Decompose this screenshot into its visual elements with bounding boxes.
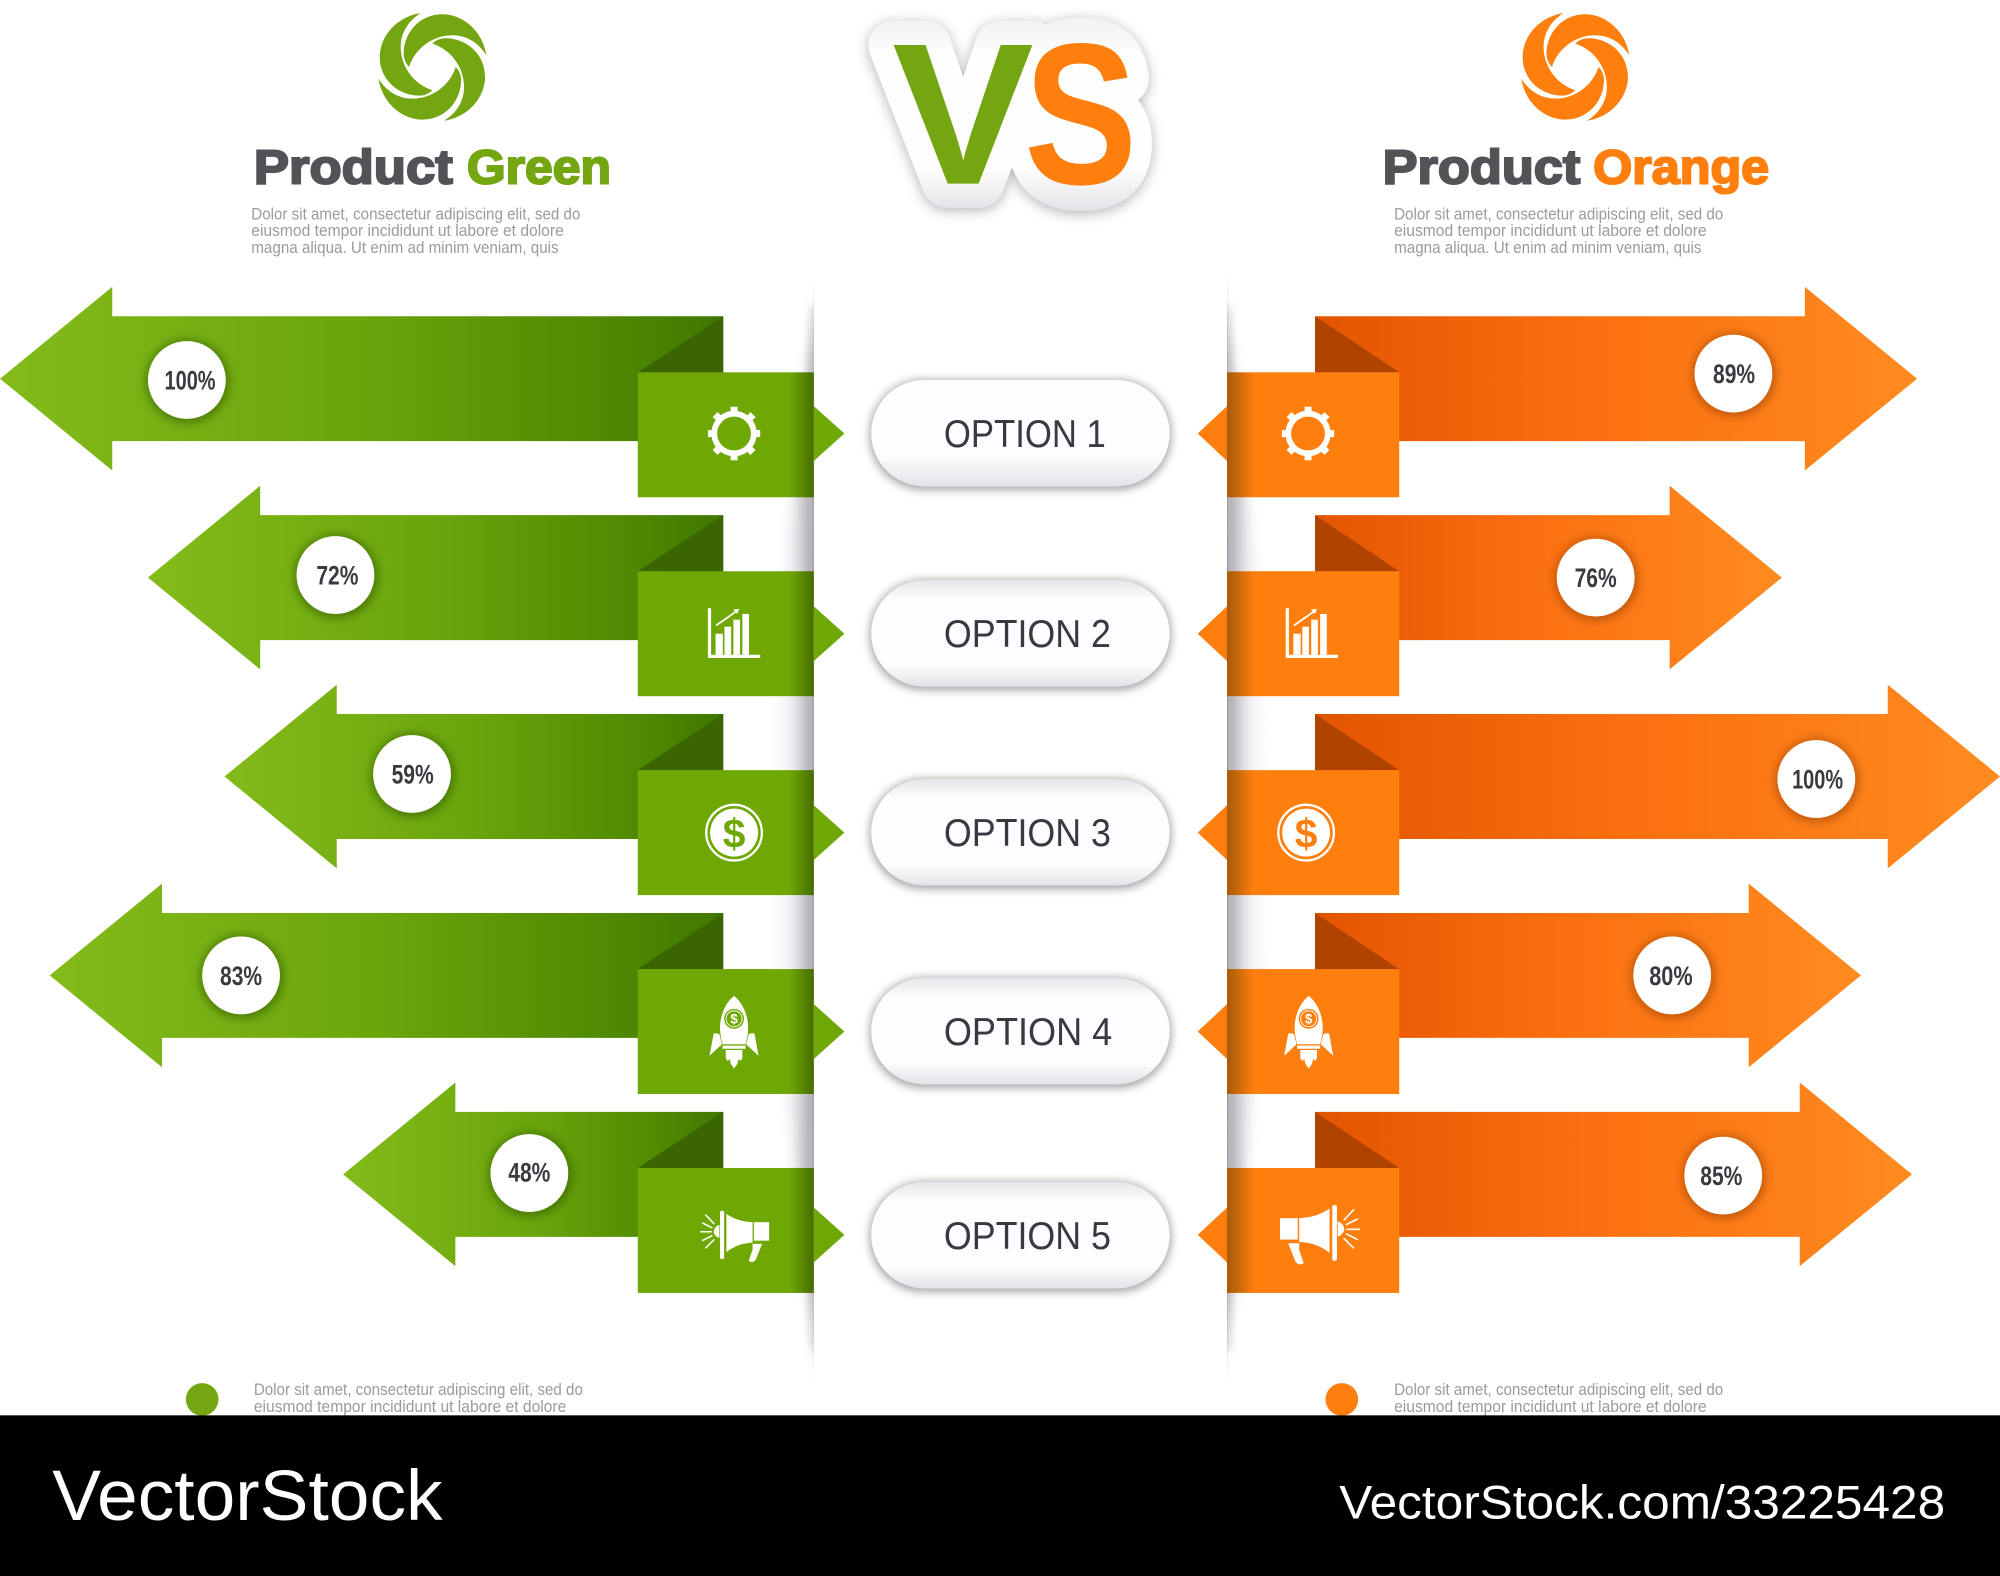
icon: bar chart [708,608,760,658]
footer bar: VectorStock [52,1456,443,1536]
option pill 1 [870,380,1171,490]
fold shadow [638,913,723,969]
value badge: 80% [1631,935,1715,1019]
pointer [1198,406,1227,461]
icon box [638,969,814,1094]
arrow: green 59% [224,685,723,868]
icon box [1227,372,1399,497]
panel: product green header [251,13,611,257]
value badge: 85%: 85% [1700,1161,1742,1191]
value badge: 100%: 100% [165,366,216,396]
panel: green arrow row 1 [0,287,844,497]
footer bar [0,1415,2000,1576]
text block: orange description [1394,204,1723,257]
text block: orange description: eiusmod tempor incididunt ut labore et dolore [1394,221,1707,240]
value badge: 59% [371,733,455,817]
heading: Product Orange: Orange [1593,142,1769,195]
value badge: 85% [1682,1135,1766,1219]
value badge: 48% [488,1132,572,1216]
fold shadow [638,316,723,372]
text block: orange description: magna aliqua. Ut enim ad minim veniam, quis [1394,238,1702,257]
value badge: 89%: 89% [1713,359,1755,389]
icon box [1227,969,1399,1094]
legend: green: Dolor sit amet, consectetur adipiscing elit, sed do [254,1380,583,1399]
arrow: green 83% [50,884,723,1067]
arrow: orange 80% [1315,884,1861,1067]
text block: green description: Dolor sit amet, consectetur adipiscing elit, sed do [251,204,580,223]
icon box [1227,571,1399,696]
text block: green description [251,204,580,257]
VS badge: S [1024,4,1137,229]
legend: green: eiusmod tempor incididunt ut labore et dolore [254,1397,566,1416]
icon: dollar coin: $ [1295,810,1318,856]
option pill 4 [870,978,1171,1088]
value badge: 72%: 72% [316,561,359,591]
option pill 2 [870,580,1171,690]
value badge: 72% [294,534,378,618]
VS badge: V [892,4,1034,229]
VS badge: V [892,2,1034,227]
heading: Product Green [254,142,611,195]
text block: orange description: Dolor sit amet, consectetur adipiscing elit, sed do [1394,204,1723,223]
panel: green arrow row 4 [50,884,844,1094]
text block: green description: eiusmod tempor incididunt ut labore et dolore [251,221,564,240]
icon box [638,1168,814,1293]
icon: rocket [1284,996,1333,1069]
value badge: 100%: 100% [1792,765,1843,795]
legend: orange: eiusmod tempor incididunt ut labore et dolore [1394,1397,1707,1416]
heading: Product Green: Green [467,142,611,195]
value badge: 83% [200,935,284,1019]
icon box [1227,770,1399,895]
left divider edge [812,273,814,1385]
heading: Product Orange: Product [1383,142,1580,195]
left divider shadow [770,306,818,1352]
value badge: 76%: 76% [1575,563,1617,593]
value badge: 100% [1775,738,1859,822]
panel: green arrow row 2 [148,486,844,696]
pointer [1198,1004,1227,1059]
fold shadow [1315,515,1399,571]
option pill 2: OPTION 2 [944,613,1111,656]
option pill 3 [870,779,1171,889]
pointer [814,406,844,461]
value badge: 89% [1692,333,1776,417]
option pill 5: OPTION 5 [944,1215,1111,1258]
option pill 1: OPTION 1 [944,413,1106,456]
footer bar: VectorStock.com/33225428 [1339,1476,1945,1529]
arrow: orange 76% [1315,486,1782,669]
right divider shadow [1223,306,1270,1352]
value badge: 48%: 48% [508,1157,551,1187]
legend: orange: Dolor sit amet, consectetur adipiscing elit, sed do [1394,1380,1723,1399]
icon box [638,571,814,696]
legend: orange [1326,1380,1723,1416]
VS badge: V [892,2,1034,227]
value badge: 83%: 83% [220,961,262,991]
icon: dollar coin [706,805,762,860]
pointer [1198,805,1227,860]
icon: green swirl logo [378,13,486,121]
icon: megaphone [700,1211,769,1262]
panel: orange arrow row 1 [1198,287,1917,497]
text block: green description: magna aliqua. Ut enim ad minim veniam, quis [251,238,559,257]
panel: orange arrow row 5 [1198,1083,1912,1293]
icon: rocket: $ [1305,1012,1313,1027]
pointer [814,805,844,860]
heading: Product Green: Product [254,142,453,195]
value badge: 100% [145,339,230,423]
VS badge: S [1024,2,1137,227]
icon: rocket [710,996,759,1069]
panel: product orange header [1383,13,1769,257]
icon: dollar coin: $ [723,810,746,856]
fold shadow [638,714,723,770]
icon: gear [1282,407,1334,460]
pointer [814,1004,844,1059]
arrow: orange 85% [1315,1083,1912,1266]
icon: rocket: $ [730,1012,738,1027]
panel: orange arrow row 2 [1198,486,1782,696]
option pill 4: OPTION 4 [944,1011,1112,1054]
panel: orange arrow row 4 [1198,884,1861,1094]
arrow: green 48% [343,1083,723,1266]
heading: Product Orange [1383,142,1769,195]
fold shadow [1315,714,1399,770]
arrow: green 72% [148,486,723,669]
icon box [638,770,814,895]
center panel [814,217,1227,1415]
option pill 5 [870,1182,1171,1292]
icon box [638,372,814,497]
option pill 3: OPTION 3 [944,812,1111,855]
arrow: green 100% [0,287,723,471]
fold shadow [1315,913,1399,969]
value badge: 59%: 59% [392,760,434,790]
pointer [814,606,844,661]
icon: megaphone [1280,1205,1360,1264]
pointer [1198,606,1227,661]
panel: green arrow row 5 [343,1083,844,1293]
legend: green [186,1380,583,1416]
panel: green arrow row 3 [224,685,844,895]
panel: orange arrow row 3 [1198,685,2000,895]
icon: orange swirl logo [1521,13,1629,121]
icon box [1227,1168,1399,1293]
arrow: orange 89% [1315,287,1917,471]
icon: gear [708,407,760,460]
VS badge: S [1024,2,1137,227]
fold shadow [1315,316,1399,372]
right divider edge [1227,268,1229,1390]
arrow: orange 100% [1315,685,2000,868]
pointer [814,1208,844,1262]
fold shadow [638,515,723,571]
icon: bar chart [1286,608,1338,658]
value badge: 80%: 80% [1649,961,1693,991]
value badge: 76% [1554,537,1638,621]
VS badge [892,2,1137,229]
fold shadow [1315,1112,1399,1168]
icon: dollar coin [1278,805,1334,860]
pointer [1198,1208,1227,1262]
fold shadow [638,1112,723,1168]
